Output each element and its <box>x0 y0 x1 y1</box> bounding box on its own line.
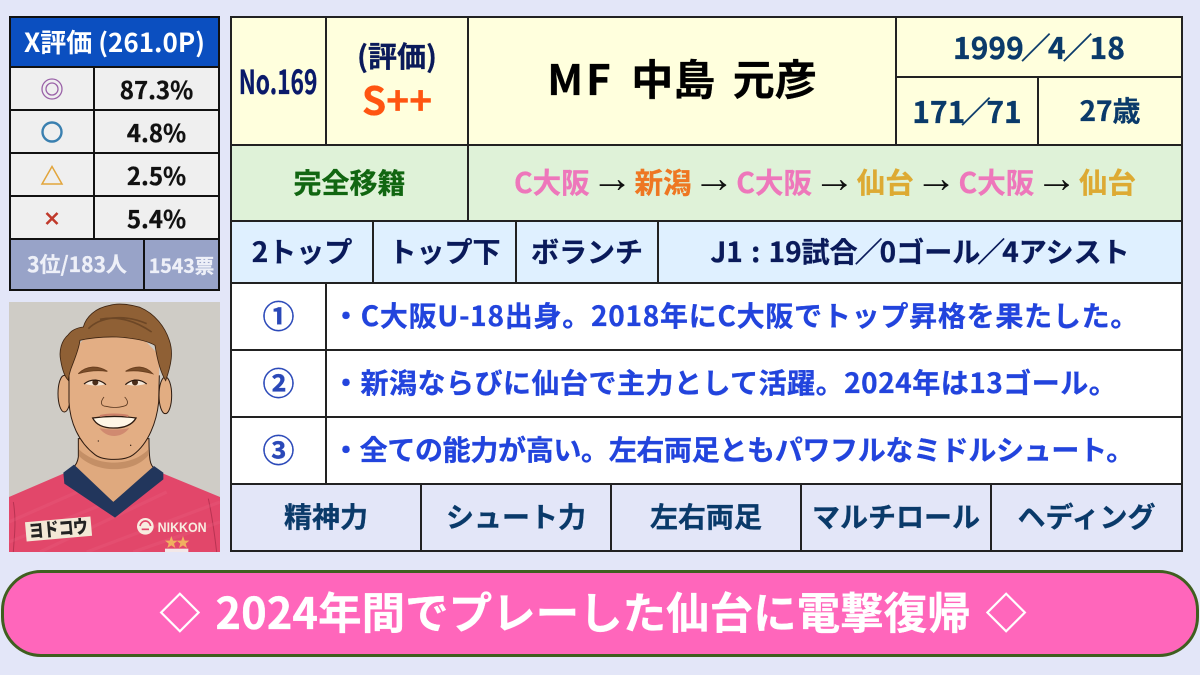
position: volante: ボランチ <box>531 231 643 271</box>
heading: X rating <box>9 16 220 68</box>
career route: C大阪 <box>514 161 590 202</box>
J1 stats: J1 : 19試合 0ゴール 4アシスト <box>710 231 1130 271</box>
panel: X rating votes <box>9 16 220 291</box>
position: two top <box>230 220 374 284</box>
point 1: ・C大阪U-18出身。2018年にC大阪でトップ昇格を果たした。 <box>332 295 1139 335</box>
value: triangle percent <box>93 152 220 197</box>
vote count <box>143 238 220 291</box>
rank: 3位/183人 <box>27 249 127 279</box>
point 3: ・全ての能力が高い。左右両足ともパワフルなミドルシュート。 <box>332 429 1134 469</box>
birth date: ／ <box>1021 24 1051 68</box>
position: two top: 2トップ <box>252 231 352 271</box>
player number: No.169 <box>239 56 318 104</box>
value: triangle percent: 2.5% <box>127 156 186 192</box>
rating: S++ <box>362 71 432 127</box>
career route: 仙台 <box>1079 161 1136 202</box>
trait: heading <box>990 483 1183 552</box>
trait: multi role: マルチロール <box>812 496 980 536</box>
birth date <box>895 16 1183 78</box>
birth date: ／ <box>1063 24 1093 68</box>
number 1: ① <box>262 292 294 338</box>
position: attacking midfielder: トップ下 <box>388 231 500 271</box>
transfer type: 完全移籍 <box>293 162 406 202</box>
rating: (評価) <box>357 34 437 76</box>
point 2: ・新潟ならびに仙台で主力として活躍。2024年は13ゴール。 <box>332 362 1117 402</box>
panel: player profile table <box>230 16 1183 552</box>
icon: triangle <box>9 152 95 197</box>
point 3 <box>325 416 1183 485</box>
age: 27歳 <box>1079 90 1141 130</box>
J1 stats: ／ <box>977 231 1005 271</box>
rating <box>325 16 469 146</box>
transfer type <box>230 144 469 222</box>
trait: shooting <box>420 483 612 552</box>
number 2: ② <box>262 359 294 405</box>
number 3: ③ <box>262 426 294 472</box>
value: cross percent: 5.4% <box>127 200 186 234</box>
career route: → <box>813 154 855 201</box>
trait: shooting: シュート力 <box>446 496 586 536</box>
point 1 <box>325 282 1183 351</box>
trait: mentality <box>230 483 422 552</box>
career route: C大阪 <box>959 161 1034 202</box>
icon: double circle <box>9 66 95 111</box>
illustration: player portrait <box>9 302 220 552</box>
value: double circle percent: 87.3% <box>120 70 193 106</box>
banner: headline: ◇ <box>986 580 1027 640</box>
number 1 <box>230 282 327 351</box>
sponsor logo <box>137 518 207 535</box>
trait: multi role <box>800 483 992 552</box>
position: volante <box>515 220 659 284</box>
career route: 仙台 <box>857 161 914 202</box>
career route: → <box>1036 154 1078 201</box>
career route: C大阪 <box>736 161 812 202</box>
player number <box>230 16 327 146</box>
icon: circle <box>9 109 95 154</box>
career route <box>467 144 1183 222</box>
banner: headline: ◇ <box>159 580 200 640</box>
position: attacking midfielder <box>372 220 517 284</box>
career route: 新潟 <box>634 161 691 202</box>
number 3 <box>230 416 327 485</box>
banner: headline <box>1 570 1199 657</box>
career route: → <box>591 154 633 201</box>
value: circle percent: 4.8% <box>127 114 186 148</box>
icon: cross <box>9 195 95 240</box>
player name: MF <box>547 47 614 108</box>
height and weight: 171 71 <box>912 88 1022 132</box>
value: circle percent <box>93 109 220 154</box>
trait: both feet: 左右両足 <box>650 496 762 536</box>
birth date: 1999 4 18 <box>953 24 1125 68</box>
J1 stats: ／ <box>855 231 883 271</box>
banner: headline: 2024年間でプレーした仙台に電撃復帰 <box>215 579 971 642</box>
J1 stats <box>657 220 1183 284</box>
vote count: 1543票 <box>149 250 214 279</box>
point 2 <box>325 349 1183 418</box>
heading: X rating: X評価 (261.0P) <box>24 23 205 60</box>
rank <box>9 238 145 291</box>
height and weight: ／ <box>961 88 991 132</box>
height and weight <box>895 76 1039 146</box>
age <box>1037 76 1183 146</box>
number 2 <box>230 349 327 418</box>
sponsor logo: NIKKON <box>158 520 207 535</box>
career route: → <box>693 154 735 201</box>
trait: heading: ヘディング <box>1017 496 1156 536</box>
trait: mentality: 精神力 <box>284 496 368 536</box>
value: double circle percent <box>93 66 220 111</box>
player name: 中島 元彦 <box>631 47 817 108</box>
value: cross percent <box>93 195 220 240</box>
sponsor patch: ヨドコウ <box>28 512 89 544</box>
trait: both feet <box>610 483 802 552</box>
career route: → <box>915 154 957 201</box>
player name <box>467 16 897 146</box>
